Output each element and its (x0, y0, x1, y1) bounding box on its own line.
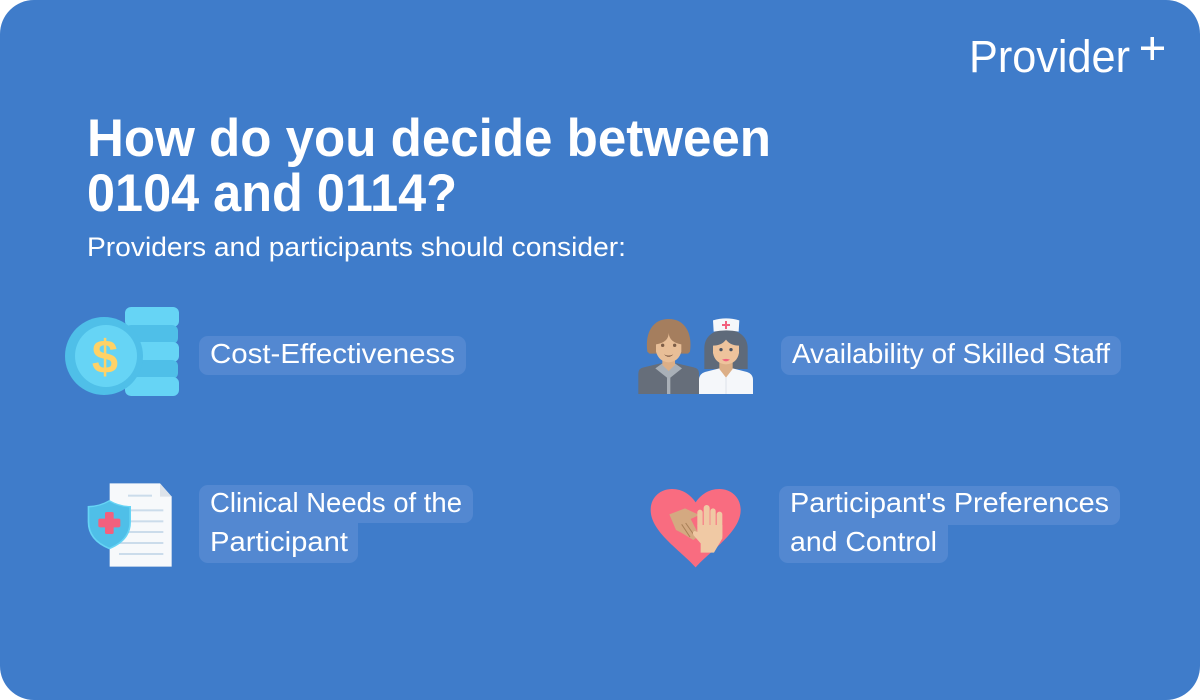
label: Participant's Preferences and Control (779, 486, 1120, 563)
label: Cost-Effectiveness (199, 336, 466, 375)
icon: two healthcare staff (638, 318, 753, 394)
label: Clinical Needs of the Participant: Clinical Needs of the (210, 487, 462, 518)
title: How do you decide between (87, 109, 771, 168)
label: Participant's Preferences and Control: Participant's Preferences (790, 487, 1109, 518)
title (87, 109, 771, 223)
label: Availability of Skilled Staff: Availability of Skilled Staff (792, 338, 1110, 369)
label: Participant's Preferences and Control: and Control (790, 526, 937, 557)
label: Cost-Effectiveness: Cost-Effectiveness (210, 338, 455, 369)
label: Clinical Needs of the Participant (199, 485, 473, 563)
icon: coin stack with dollar: $ (92, 330, 118, 383)
icon: coin stack with dollar (65, 307, 179, 396)
label: Clinical Needs of the Participant: Participant (210, 526, 348, 557)
icon: heart with two hands (651, 489, 741, 567)
title: 0104 and 0114? (87, 164, 457, 223)
icon: medical document with shield (88, 483, 172, 567)
subtitle: Providers and participants should consider: (87, 232, 626, 262)
logo: Provider+: Provider (969, 31, 1130, 82)
